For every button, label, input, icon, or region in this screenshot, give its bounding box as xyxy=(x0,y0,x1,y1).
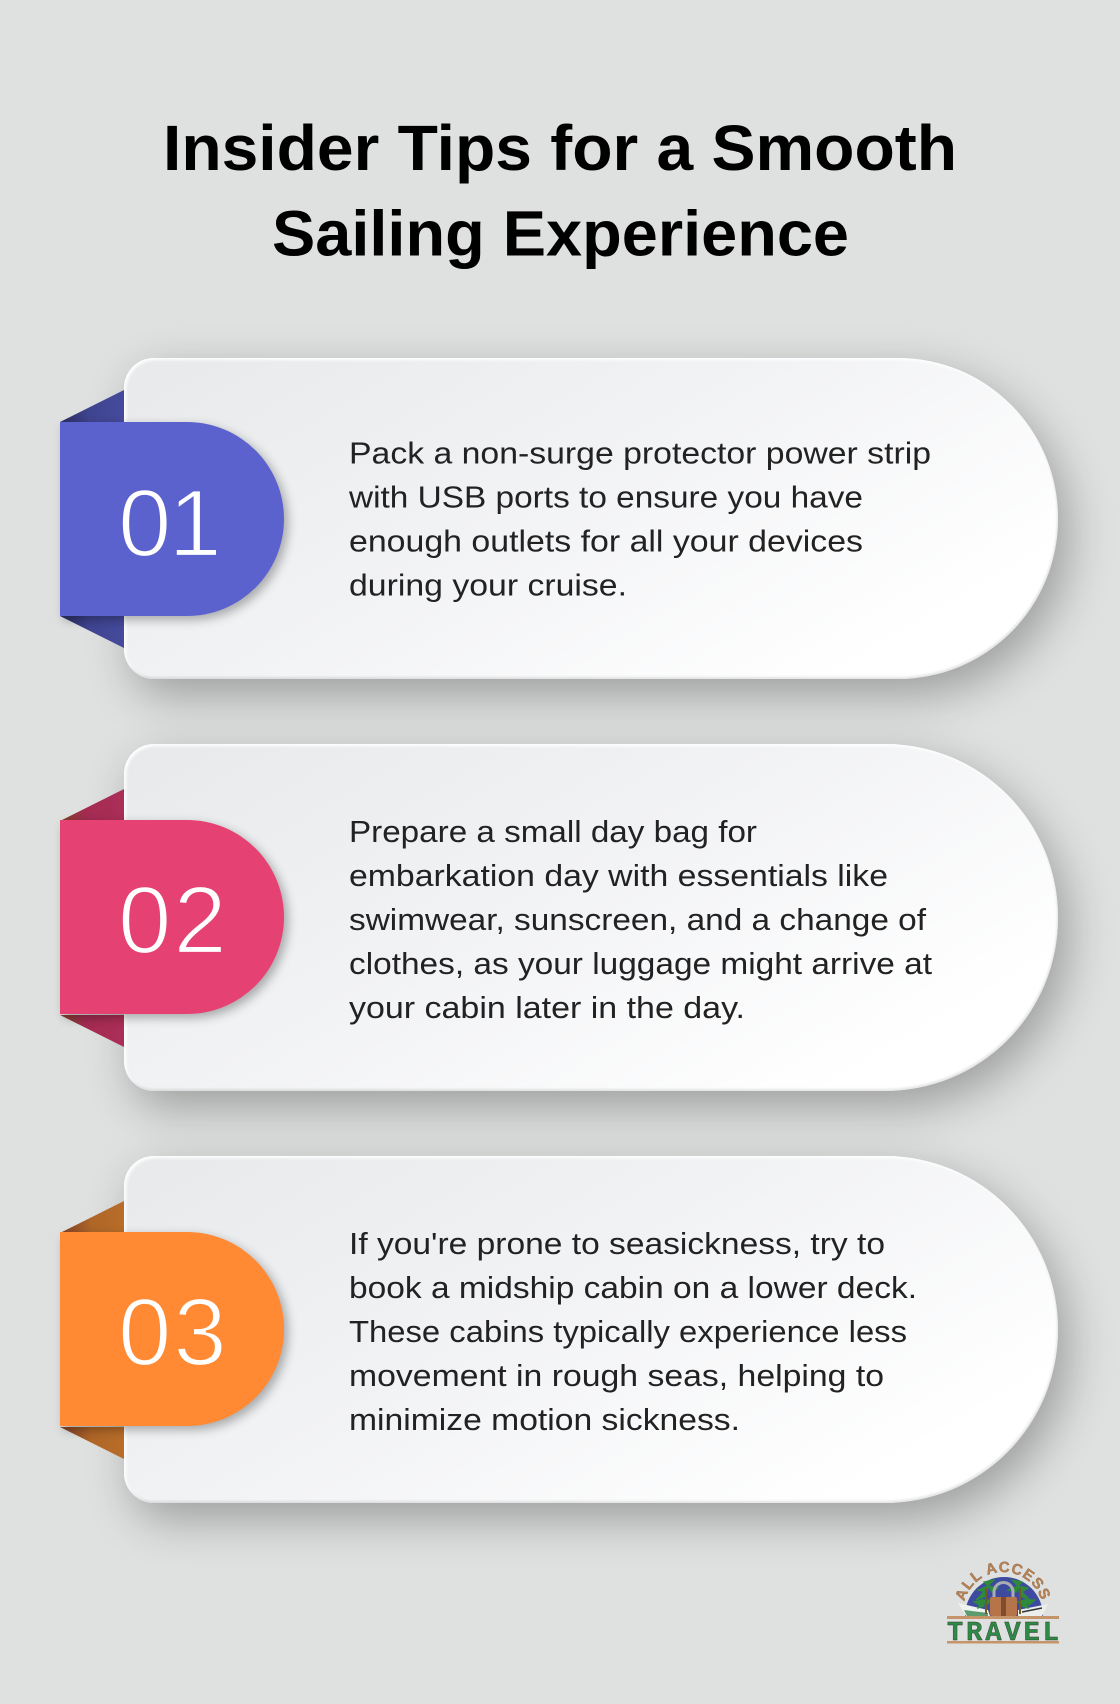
logo boats xyxy=(958,1603,1048,1616)
logo wordmark: TRAVEL xyxy=(947,1619,1059,1649)
title: Sailing Experience xyxy=(272,198,849,270)
panel: tip 1 xyxy=(58,348,1092,720)
tip 2 text: Prepare a small day bag for xyxy=(348,814,756,848)
tip 1 text: enough outlets for all your devices xyxy=(348,524,862,558)
tip 1 text: during your cruise. xyxy=(348,568,626,602)
tip 2 text xyxy=(348,814,932,1024)
tip 1 text xyxy=(348,436,930,602)
number badge 1 xyxy=(60,422,284,616)
tip 1 text: with USB ports to ensure you have xyxy=(348,480,862,514)
card background 3 xyxy=(124,1156,1058,1503)
tip 3 text: movement in rough seas, helping to xyxy=(348,1358,884,1392)
ribbon folds 3 xyxy=(60,1201,124,1459)
tip 3 text: These cabins typically experience less xyxy=(348,1314,906,1348)
tip 3 text xyxy=(348,1226,916,1436)
card background 2 xyxy=(124,744,1058,1091)
tip 3 text: If you're prone to seasickness, try to xyxy=(348,1226,884,1260)
logo bars xyxy=(947,1616,1059,1644)
card background 1 xyxy=(124,358,1058,679)
panel: tip 3 xyxy=(58,1146,1092,1544)
number 03: 03 xyxy=(118,1279,229,1386)
title: Insider Tips for a Smooth xyxy=(163,112,957,184)
number badge 2 xyxy=(60,820,284,1014)
logo arc text: ALL ACCESS xyxy=(956,1562,1050,1602)
logo: All Access Travel xyxy=(947,1562,1059,1649)
tip 2 text: swimwear, sunscreen, and a change of xyxy=(348,902,926,936)
number 01: 01 xyxy=(118,470,219,577)
logo palms xyxy=(974,1580,1035,1614)
ribbon folds 1 xyxy=(60,390,124,648)
logo dome xyxy=(965,1577,1043,1616)
ribbon folds 2 xyxy=(60,789,124,1047)
logo padlock xyxy=(990,1582,1017,1616)
tip 3 text: minimize motion sickness. xyxy=(348,1402,740,1436)
tip 2 text: your cabin later in the day. xyxy=(348,990,744,1024)
tip 2 text: clothes, as your luggage might arrive at xyxy=(348,946,932,980)
tip 1 text: Pack a non-surge protector power strip xyxy=(348,436,930,470)
number badge 3 xyxy=(60,1232,284,1426)
tip 3 text: book a midship cabin on a lower deck. xyxy=(348,1270,916,1304)
number 02: 02 xyxy=(118,867,229,974)
panel: tip 2 xyxy=(58,734,1092,1132)
title xyxy=(163,112,957,270)
tip 2 text: embarkation day with essentials like xyxy=(348,858,888,892)
